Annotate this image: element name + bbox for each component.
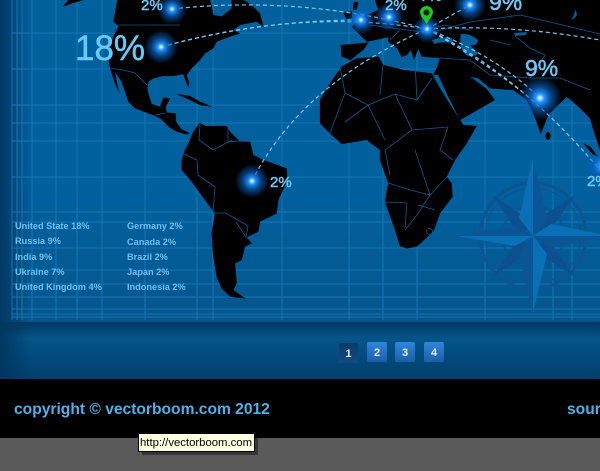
city glows xyxy=(144,0,600,198)
compass rose xyxy=(457,158,600,313)
legend: country shares: Canada 2% xyxy=(127,237,176,247)
percentage labels xyxy=(75,0,600,191)
lower band xyxy=(0,322,600,379)
world map xyxy=(63,0,600,298)
icon: green map pin xyxy=(420,6,433,24)
footer bar xyxy=(0,379,600,438)
legend: country shares xyxy=(15,221,186,292)
legend: country shares: Ukraine 7% xyxy=(15,267,65,277)
pagination buttons xyxy=(339,342,444,363)
tooltip: http://vectorboom.com xyxy=(140,437,252,449)
pagination buttons: 1 xyxy=(345,348,352,360)
legend: country shares: Japan 2% xyxy=(127,267,169,277)
legend: country shares: Brazil 2% xyxy=(127,252,168,262)
tooltip xyxy=(138,434,258,455)
legend: country shares: Russia 9% xyxy=(15,236,61,246)
dashed connection arcs xyxy=(161,5,600,181)
pagination buttons: 2 xyxy=(374,347,380,359)
percentage labels: 18% xyxy=(75,29,145,68)
legend: country shares: Germany 2% xyxy=(127,221,183,231)
legend: country shares: United State 18% xyxy=(15,221,90,231)
africa, madagascar and eurasia xyxy=(320,0,600,248)
legend: country shares: Indonesia 2% xyxy=(127,282,186,292)
map panel background xyxy=(0,0,600,322)
percentage labels: 9% xyxy=(525,55,558,81)
percentage labels: 2% xyxy=(270,174,292,191)
pagination buttons: 3 xyxy=(402,347,408,359)
black and caspian seas xyxy=(432,9,577,56)
legend: country shares: India 9% xyxy=(15,252,52,262)
legend: country shares: United Kingdom 4% xyxy=(15,282,102,292)
pagination buttons: 4 xyxy=(431,347,438,359)
americas xyxy=(63,0,287,298)
footer bar: copyright © vectorboom.com 2012 xyxy=(14,401,270,418)
bottom gray strip xyxy=(0,438,600,471)
country borders xyxy=(110,10,600,237)
